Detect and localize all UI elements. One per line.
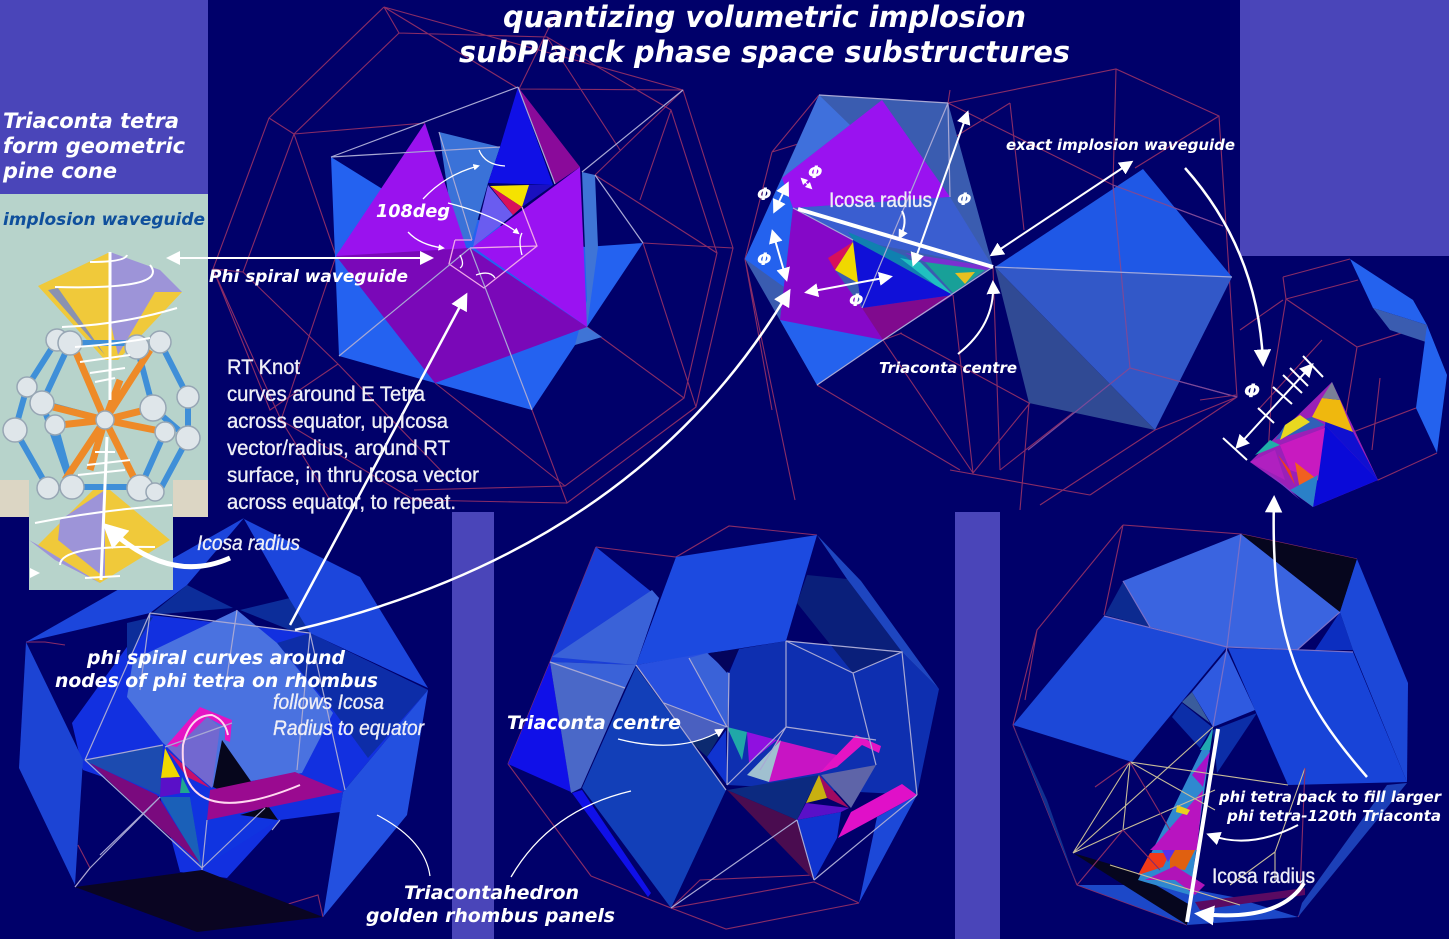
left big rhombus	[1013, 616, 1227, 762]
dimension arrows	[1223, 356, 1323, 460]
phi symbols	[757, 163, 1260, 402]
white spiral and axis	[35, 252, 177, 580]
photo backdrop	[0, 194, 208, 590]
wireframe	[1200, 259, 1437, 480]
right big rhombus	[1228, 648, 1407, 785]
text: RT Knot description: surface, in thru Icosa vector	[227, 464, 479, 487]
phi symbols: Φ	[957, 190, 971, 210]
text: phi spiral curves: nodes of phi tetra on rhombus	[55, 670, 378, 692]
arrows	[773, 114, 1130, 354]
right rhombus	[995, 169, 1232, 277]
arrow head on photo edge	[30, 568, 40, 578]
arrow: up to node	[290, 297, 465, 625]
icosa radius line	[798, 209, 993, 267]
panel: bottom centre rhombus tetra	[508, 526, 939, 929]
text: pine cone heading: Triaconta tetra	[3, 109, 179, 133]
bright blue base	[72, 615, 428, 878]
big rhombus	[582, 667, 726, 908]
dark lower cells	[1172, 703, 1212, 748]
title: quantizing volumetric implosion	[503, 0, 1026, 34]
text: icosa radius left: Icosa radius	[197, 532, 300, 555]
pack pyramid	[1250, 382, 1378, 507]
balls	[3, 329, 200, 501]
phi symbols: Φ	[808, 163, 822, 183]
right dark field	[727, 641, 939, 795]
black tetra	[213, 740, 278, 820]
panel: top right open rhombus tetra	[745, 69, 1237, 510]
curved arrows	[1200, 500, 1367, 915]
magenta band	[769, 740, 837, 782]
text: phi spiral curves	[55, 647, 378, 692]
arrow: curve to tetra	[295, 293, 788, 630]
phi symbols: Φ	[849, 291, 863, 311]
edges	[85, 610, 345, 870]
angle arcs	[460, 150, 522, 278]
leader curves	[511, 730, 722, 877]
curved arrows: 108deg	[408, 166, 518, 248]
dark blue upper right	[277, 633, 428, 758]
central light overlay	[127, 610, 333, 787]
magenta arch	[167, 707, 232, 747]
text: pine cone heading	[2, 109, 186, 183]
edges	[1104, 534, 1353, 727]
magenta strip	[1195, 888, 1305, 910]
pentagon node ring	[449, 207, 537, 288]
yellow and red tetra	[490, 185, 529, 207]
edges	[793, 95, 993, 385]
top right dark	[797, 575, 902, 673]
phi symbols: Φ	[757, 185, 771, 205]
purple cell	[160, 777, 182, 797]
phi symbols: Φ	[757, 250, 771, 270]
kite	[1192, 650, 1255, 727]
arrows across panels	[170, 258, 788, 630]
deep blue tetra	[853, 240, 953, 308]
back translucent panels	[439, 132, 500, 240]
icosa radius arrow	[108, 528, 230, 567]
lower blue faces	[160, 797, 202, 868]
blue side panels	[1350, 259, 1427, 325]
text: golden rhombus panels: golden rhombus panels	[366, 905, 615, 927]
text: triaconta centre bottom: Triaconta centre	[507, 712, 681, 734]
lower tetra	[727, 775, 819, 820]
spectrum strip	[848, 232, 953, 295]
panel: bottom left rhombus tetra	[19, 518, 430, 932]
text: follows icosa radius: follows Icosa	[273, 691, 384, 714]
wire outline	[508, 526, 859, 929]
bottom cone	[38, 490, 170, 583]
leader curve	[377, 815, 430, 876]
panel: bottom right rhombus tetra	[1013, 500, 1408, 925]
back blue star	[331, 157, 643, 410]
right blue panel	[323, 690, 428, 917]
text: phi tetra pack: phi tetra pack to fill larger	[1218, 788, 1443, 806]
title	[459, 0, 1070, 69]
wireframe	[745, 69, 1237, 510]
ridge edges	[331, 87, 683, 410]
blue band	[817, 535, 939, 689]
text: follows icosa radius: Radius to equator	[273, 717, 425, 740]
orange spokes	[45, 350, 165, 480]
text: icosa radius top: Icosa radius	[829, 189, 932, 212]
panel: top centre phi tetra triacontahedron	[213, 7, 733, 503]
top left blue panel	[26, 518, 244, 642]
text: RT Knot description	[227, 356, 479, 514]
text: RT Knot description: RT Knot	[227, 356, 300, 379]
text: RT Knot description: across equator, to repeat.	[227, 491, 456, 514]
tetra stack	[1138, 727, 1213, 895]
text: implosion waveguide: implosion waveguide	[3, 210, 205, 230]
blue wedge	[793, 197, 993, 267]
text: pine cone heading: pine cone	[2, 159, 117, 183]
wire struts	[1073, 727, 1305, 905]
text: icosa radius bottom right: Icosa radius	[1212, 865, 1315, 888]
text: 108deg: 108deg	[376, 201, 450, 222]
text: follows icosa radius	[273, 691, 425, 740]
panel: far right phi tetra	[1185, 168, 1447, 507]
wireframe: top centre	[213, 7, 733, 503]
text: phi spiral waveguide: Phi spiral waveguide	[209, 267, 408, 287]
text: phi tetra pack: phi tetra-120th Triaconta	[1226, 807, 1441, 825]
steel blue back	[745, 95, 993, 385]
blue struts	[15, 340, 188, 490]
base wedge	[1078, 885, 1298, 925]
left blue panel	[19, 642, 83, 885]
dark top cells	[150, 585, 233, 615]
text: pine cone heading: form geometric	[3, 134, 186, 158]
arrow: waveguide to pack	[1185, 168, 1263, 362]
teal cell	[180, 777, 190, 793]
spiral curve	[183, 715, 300, 803]
edges	[550, 641, 917, 908]
text: golden rhombus panels: Triacontahedron	[404, 882, 579, 904]
text: RT Knot description: vector/radius, around RT	[227, 437, 450, 460]
left panel	[508, 662, 571, 792]
arrow: phi spiral waveguide	[170, 257, 430, 259]
left side band	[1013, 725, 1077, 885]
wire outline	[1013, 525, 1357, 925]
magenta strip	[838, 784, 917, 838]
text: golden rhombus panels	[366, 882, 615, 927]
text: RT Knot description: curves around E Tetra	[227, 383, 425, 406]
wire outline	[26, 642, 323, 917]
upper blue and purple tetra faces	[488, 87, 553, 185]
struts	[15, 340, 188, 490]
arch	[819, 735, 881, 773]
second panel	[636, 653, 729, 727]
text: phi spiral curves: phi spiral curves around	[86, 647, 345, 669]
text: phi tetra pack	[1218, 788, 1443, 825]
upper purple	[782, 100, 950, 208]
rhombus overlay lines	[1028, 185, 1237, 450]
top right blue panel	[244, 519, 428, 688]
top left panel	[550, 547, 659, 665]
icosa radius line	[1187, 729, 1218, 922]
purple diagonal strip	[90, 763, 200, 863]
red strip	[167, 750, 210, 788]
yellow red tetra	[835, 242, 858, 283]
top cone	[38, 252, 182, 360]
top rhombus	[636, 535, 817, 665]
right band	[1340, 559, 1408, 782]
yellow face	[161, 748, 180, 778]
bright blue flanks	[745, 178, 883, 385]
central purple faces	[336, 123, 467, 256]
panel: implosion waveguide photo	[0, 194, 230, 590]
phi symbols: Φ	[1244, 380, 1260, 402]
top fan	[1123, 534, 1340, 650]
magenta strip	[207, 772, 343, 820]
lower purple	[780, 208, 953, 340]
periwinkle face	[167, 713, 220, 788]
text: RT Knot description: across equator, up Icosa	[227, 410, 448, 433]
bottom black rhombus	[75, 870, 323, 932]
right lower panel	[859, 795, 917, 903]
text: exact implosion waveguide: exact implosion waveguide	[1006, 136, 1235, 154]
text: triaconta centre top: Triaconta centre	[879, 359, 1017, 377]
right side band	[1298, 783, 1407, 917]
title: subPlanck phase space substructures	[459, 35, 1070, 69]
